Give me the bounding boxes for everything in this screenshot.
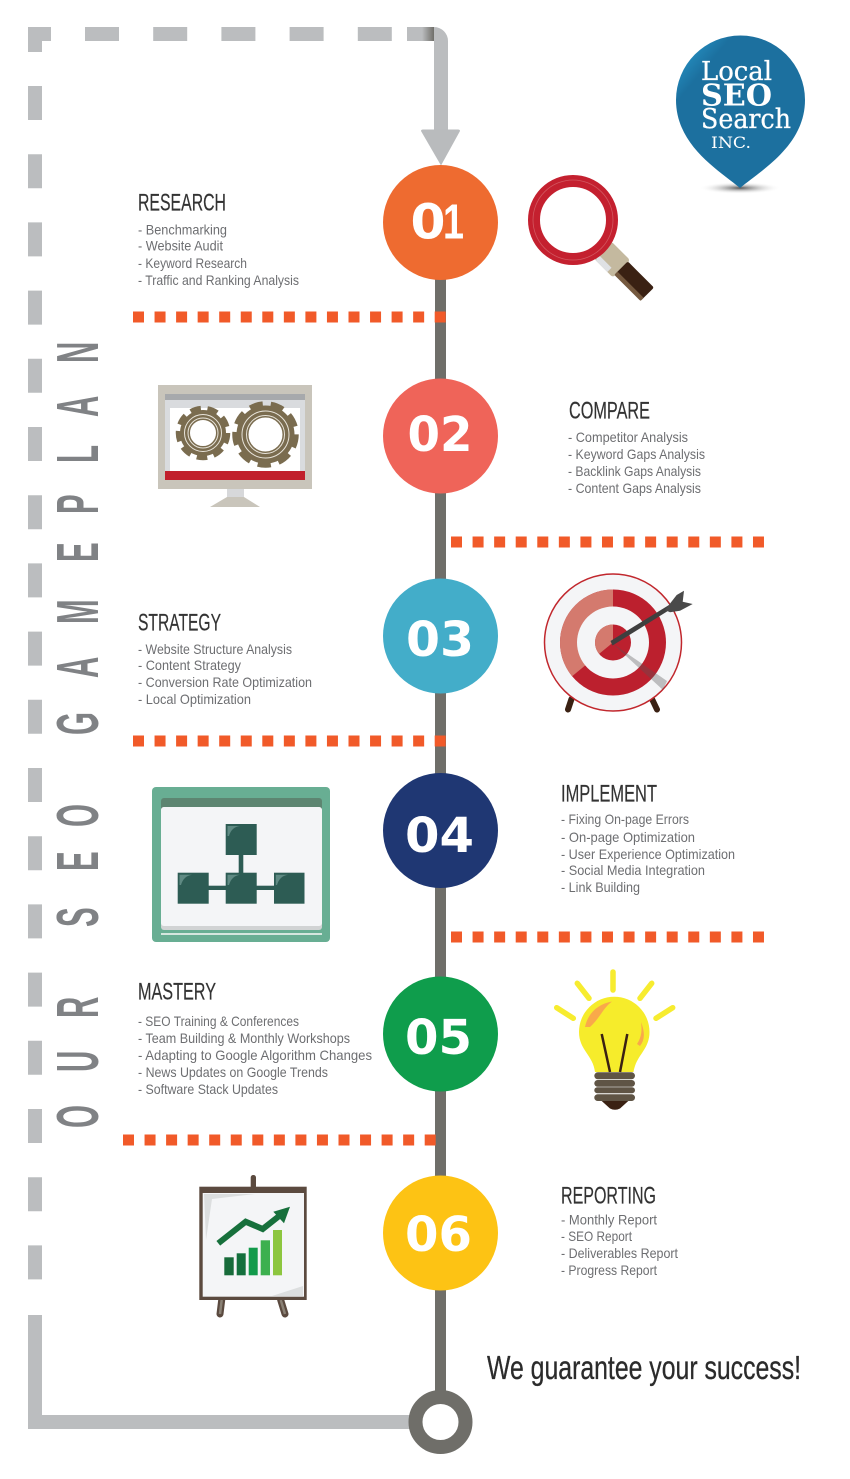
panel: mastery: - Adapting to Google Algorithm Changes	[138, 1047, 372, 1063]
icon: target with arrow	[544, 574, 693, 711]
arrow into step 01	[421, 130, 460, 166]
step 03 circle: 03	[406, 612, 474, 668]
step 01 circle: 1	[443, 196, 464, 250]
dashed path from start to arrow	[28, 27, 448, 1281]
step 04 circle	[383, 773, 498, 888]
panel: reporting	[561, 1182, 678, 1278]
panel: strategy	[138, 610, 312, 707]
panel: mastery	[138, 978, 372, 1097]
panel: research: RESEARCH	[138, 190, 226, 216]
logo: location pin: SEO	[701, 78, 772, 114]
panel: implement: - User Experience Optimization	[561, 846, 735, 862]
step 01 circle: 0	[410, 194, 446, 250]
panel: research: - Traffic and Ranking Analysis	[138, 272, 299, 288]
solid return path	[35, 1315, 420, 1422]
logo: location pin: INC.	[711, 133, 751, 152]
step 05 circle	[383, 976, 498, 1092]
panel: strategy: STRATEGY	[138, 610, 221, 636]
panel: reporting: - SEO Report	[561, 1228, 632, 1244]
divider dots 2	[451, 536, 765, 548]
panel: implement: - Link Building	[561, 879, 640, 895]
icon: sitemap window	[152, 787, 330, 942]
panel: mastery: - Team Building & Monthly Workshops	[138, 1030, 350, 1046]
panel: implement	[561, 780, 735, 895]
logo: location pin: Local	[701, 57, 772, 87]
panel: mastery: - News Updates on Google Trends	[138, 1064, 328, 1080]
divider dots 4	[451, 932, 765, 942]
panel: compare: - Backlink Gaps Analysis	[568, 463, 701, 479]
logo: location pin: Search	[701, 104, 791, 135]
panel: compare: - Content Gaps Analysis	[568, 480, 701, 496]
step 03 circle	[383, 578, 498, 694]
panel: reporting: - Monthly Report	[561, 1212, 657, 1228]
step 02 circle: 02	[408, 407, 472, 463]
panel: implement: - Fixing On-page Errors	[561, 811, 689, 827]
panel: implement: - On-page Optimization	[561, 829, 695, 845]
panel: mastery: - Software Stack Updates	[138, 1081, 278, 1097]
end ring	[416, 1397, 466, 1447]
panel: research	[138, 190, 299, 288]
panel: research: - Benchmarking	[138, 222, 227, 238]
panel: mastery: - SEO Training & Conferences	[138, 1013, 299, 1029]
icon: light bulb	[557, 972, 673, 1110]
timeline	[435, 270, 446, 1400]
panel: compare	[568, 398, 705, 496]
step 04 circle: 04	[405, 808, 474, 864]
step 05 circle: 05	[405, 1010, 472, 1066]
divider dots 5	[123, 1134, 436, 1146]
title: our seo gameplan: OUR SEO GAMEPLAN	[45, 342, 111, 1128]
panel: compare: COMPARE	[569, 398, 650, 424]
icon: magnifying glass	[533, 180, 656, 303]
panel: research: - Website Audit	[138, 238, 223, 254]
panel: reporting: REPORTING	[561, 1182, 656, 1210]
panel: compare: - Competitor Analysis	[568, 429, 688, 445]
panel: strategy: - Content Strategy	[138, 657, 241, 673]
panel: implement: - Social Media Integration	[561, 862, 705, 878]
panel: research: - Keyword Research	[138, 255, 247, 271]
divider dots 3	[133, 736, 446, 746]
panel: reporting: - Deliverables Report	[561, 1245, 678, 1261]
panel: mastery: MASTERY	[138, 978, 216, 1006]
step 06 circle: 06	[405, 1207, 472, 1263]
step 06 circle	[383, 1176, 498, 1290]
panel: strategy: - Website Structure Analysis	[138, 641, 292, 657]
panel: strategy: - Local Optimization	[138, 691, 251, 707]
step 02 circle	[383, 378, 498, 494]
icon: monitor with gears	[158, 385, 312, 507]
panel: compare: - Keyword Gaps Analysis	[568, 446, 705, 462]
panel: reporting: - Progress Report	[561, 1262, 657, 1278]
step 01 circle	[383, 165, 498, 280]
panel: implement: IMPLEMENT	[561, 780, 657, 808]
logo: location pin	[676, 36, 805, 194]
divider dots 1	[133, 312, 446, 322]
panel: strategy: - Conversion Rate Optimization	[138, 674, 312, 690]
icon: presentation chart	[199, 1175, 307, 1314]
